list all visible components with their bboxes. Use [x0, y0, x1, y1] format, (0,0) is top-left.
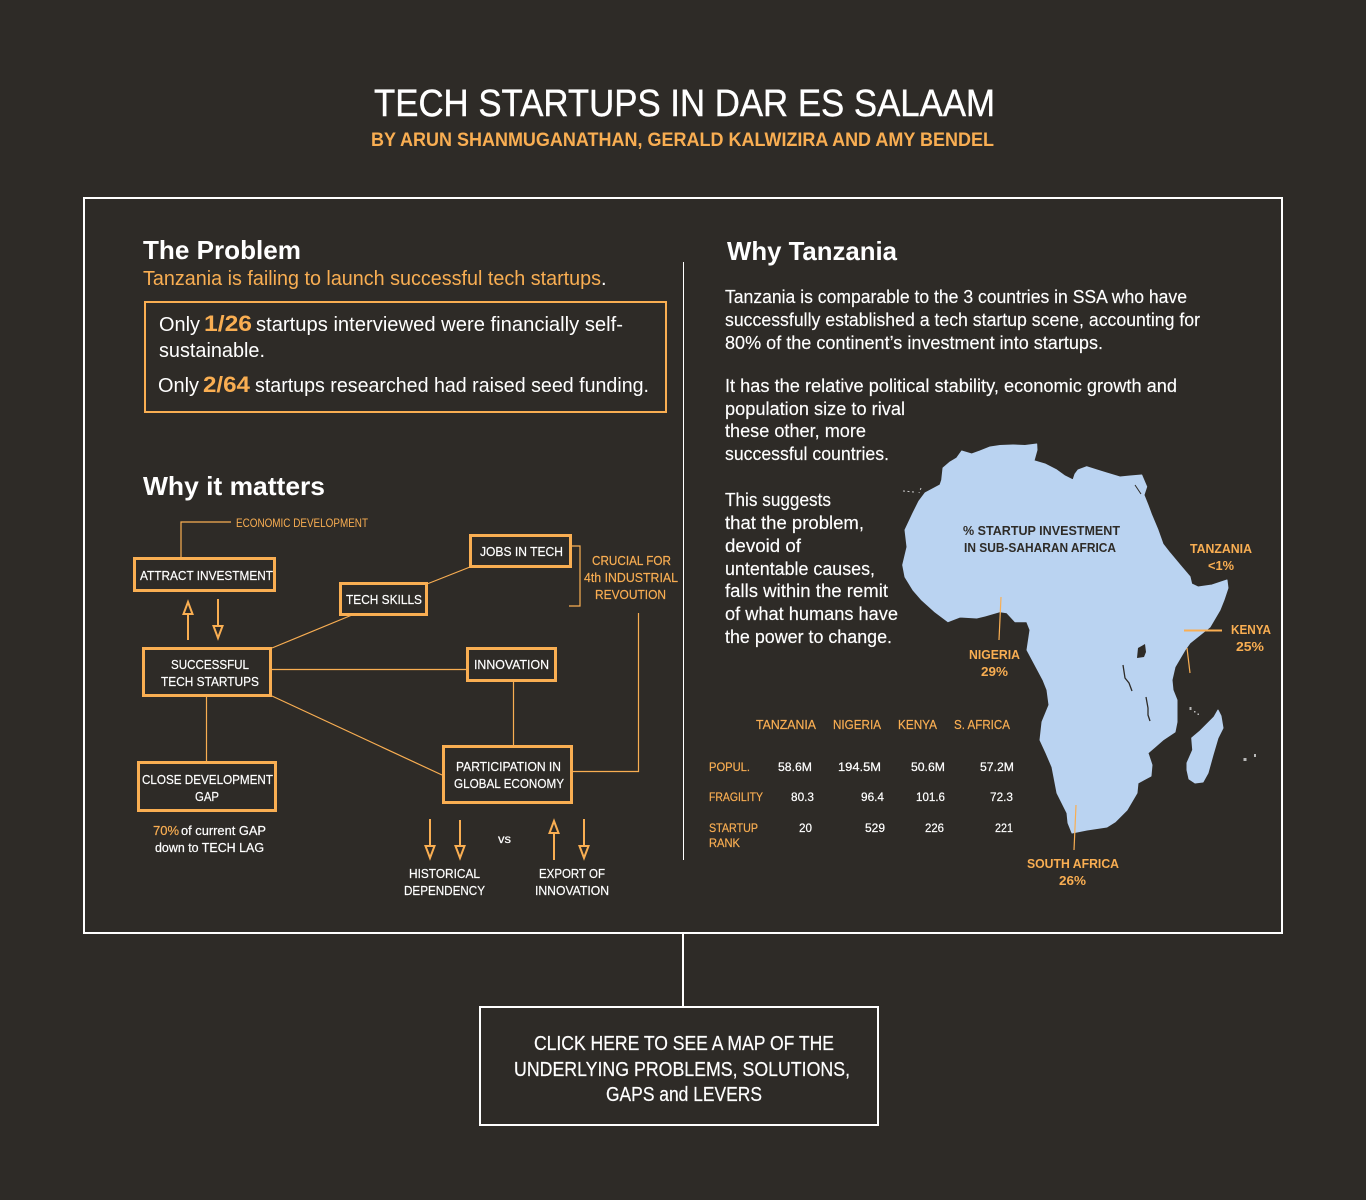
stat: 2/64: 2/64 — [203, 372, 251, 397]
row: population: 50.6M — [911, 760, 945, 774]
red sea notch — [1135, 485, 1141, 494]
paragraph: comparable countries: 80% of the continent’s investment into startups. — [725, 333, 1103, 353]
problem statement: Tanzania is failing to launch successful tech startups — [143, 268, 601, 290]
heading: why tanzania: Why Tanzania — [727, 236, 898, 266]
label: export of innovation — [535, 866, 609, 898]
paragraph: relative stability: successful countries. — [725, 444, 889, 464]
row: startup rank: RANK — [709, 836, 740, 850]
call to action button: UNDERLYING PROBLEMS, SOLUTIONS, — [514, 1059, 850, 1081]
central divider — [682, 262, 684, 860]
madagascar — [1187, 710, 1223, 783]
stat: 1/26: startups interviewed were financially self- — [256, 314, 623, 336]
paragraph: relative stability: population size to rival — [725, 399, 905, 419]
row: population: POPUL. — [709, 760, 750, 774]
paragraph: humans have the power to change: the power to change. — [725, 627, 892, 647]
callout: tanzania: <1% — [1208, 558, 1234, 573]
paragraph: humans have the power to change — [725, 490, 898, 647]
note: crucial for 4th industrial revolution: CRUCIAL FOR — [592, 553, 671, 568]
box: jobs in tech — [470, 536, 570, 566]
row: startup rank — [709, 821, 1013, 850]
callout: south africa: SOUTH AFRICA — [1027, 856, 1120, 871]
stat: 2/64: startups researched had raised seed funding. — [255, 375, 649, 397]
map caption: IN SUB-SAHARAN AFRICA — [964, 541, 1116, 555]
label: export of innovation: EXPORT OF — [539, 866, 605, 881]
label: export of innovation: INNOVATION — [535, 883, 609, 898]
text: vs: vs — [498, 832, 511, 846]
comoros islands — [1190, 707, 1199, 715]
callout: kenya: KENYA — [1231, 622, 1272, 637]
note: crucial for 4th industrial revolution: REVOUTION — [595, 587, 666, 602]
box: tech skills: TECH SKILLS — [346, 592, 422, 607]
label: historical dependency: DEPENDENCY — [404, 883, 485, 898]
map caption: % STARTUP INVESTMENT — [963, 524, 1120, 538]
connector line to button — [682, 933, 684, 1006]
map caption — [963, 524, 1120, 555]
table header: TANZANIA — [756, 718, 817, 732]
box: participation in global economy: PARTICIPATION IN — [456, 759, 561, 774]
table header: S. AFRICA — [954, 718, 1011, 732]
arrow: export of innovation down — [580, 819, 588, 858]
note: 70 percent of current gap: of current GAP — [181, 823, 266, 838]
africa mainland — [903, 444, 1228, 833]
paragraph: comparable countries: successfully established a tech startup scene, accounting for — [725, 310, 1200, 330]
note: 70 percent of current gap: 70% — [153, 823, 179, 838]
box: close development gap — [138, 762, 276, 810]
row: fragility: FRAGILITY — [709, 790, 763, 804]
stat: 1/26: Only — [159, 314, 200, 336]
row: population — [709, 760, 1014, 774]
stat: 1/26: sustainable. — [159, 340, 265, 362]
subtitle: authors: BY ARUN SHANMUGANATHAN, GERALD KALWIZIRA AND AMY BENDEL — [371, 130, 994, 151]
call to action button: GAPS and LEVERS — [606, 1084, 762, 1106]
paragraph: humans have the power to change: falls within the remit — [725, 581, 888, 601]
box: jobs in tech: JOBS IN TECH — [480, 544, 563, 559]
callout: nigeria — [969, 597, 1021, 679]
table header — [756, 718, 1011, 732]
paragraph: humans have the power to change: This suggests — [725, 490, 831, 510]
row: fragility: 101.6 — [916, 790, 945, 804]
note: crucial for 4th industrial revolution: 4th INDUSTRIAL — [584, 570, 678, 585]
stat: 1/26 — [159, 311, 623, 362]
heading: why it matters: Why it matters — [143, 471, 325, 501]
box: innovation: INNOVATION — [474, 657, 549, 672]
callout: tanzania: TANZANIA — [1190, 541, 1253, 556]
connector lines — [181, 522, 638, 775]
box: participation in global economy — [444, 746, 572, 802]
label: historical dependency — [404, 866, 485, 898]
row: fragility: 80.3 — [791, 790, 814, 804]
paragraph: humans have the power to change: that the problem, — [725, 513, 864, 533]
main panel frame — [84, 198, 1282, 933]
callout: south africa: 26% — [1059, 873, 1086, 888]
row: startup rank: 226 — [925, 821, 944, 835]
map of africa — [903, 444, 1256, 833]
lake malawi — [1146, 697, 1150, 721]
full stop: . — [601, 268, 607, 290]
note: 70 percent of current gap — [153, 823, 266, 855]
heading: the problem: The Problem — [143, 235, 301, 265]
stat: 2/64: Only — [158, 375, 199, 397]
row: fragility — [709, 790, 1013, 804]
note: 70 percent of current gap: down to TECH LAG — [155, 840, 264, 855]
table header: KENYA — [898, 718, 938, 732]
box: participation in global economy: GLOBAL ECONOMY — [454, 776, 564, 791]
arrow: historical dependency 1 — [426, 819, 434, 858]
panel: why tanzania — [709, 236, 1272, 888]
statistics box — [145, 302, 666, 412]
row: startup rank: STARTUP — [709, 821, 758, 835]
callout: nigeria: 29% — [981, 664, 1008, 679]
box: close development gap: CLOSE DEVELOPMENT — [142, 772, 273, 787]
callout: kenya — [1184, 622, 1272, 654]
box: attract investment — [134, 558, 274, 590]
table header: NIGERIA — [833, 718, 882, 732]
paragraph: humans have the power to change: of what humans have — [725, 604, 898, 624]
arrow: export of innovation up — [550, 821, 558, 860]
paragraph: comparable countries: Tanzania is comparable to the 3 countries in SSA who have — [725, 287, 1187, 307]
callout: south africa — [1027, 805, 1120, 888]
arrow: historical dependency 2 — [456, 820, 464, 858]
arrow: up to attract investment — [184, 602, 192, 640]
call to action button: CLICK HERE TO SEE A MAP OF THE — [534, 1033, 834, 1055]
panel: why it matters — [134, 471, 678, 898]
lake victoria — [1137, 644, 1146, 658]
lake tanganyika — [1123, 665, 1132, 691]
title: TECH STARTUPS IN DAR ES SALAAM — [374, 83, 995, 125]
panel: the problem — [143, 235, 666, 412]
paragraph: relative stability: these other, more — [725, 421, 866, 441]
row: startup rank: 529 — [865, 821, 885, 835]
label: economic development: ECONOMIC DEVELOPMENT — [236, 518, 368, 530]
box: successful tech startups: SUCCESSFUL — [171, 657, 249, 672]
comparison table — [709, 718, 1014, 850]
callout: nigeria: NIGERIA — [969, 647, 1021, 662]
note: crucial for 4th industrial revolution — [584, 553, 678, 602]
mauritius and reunion — [1244, 754, 1256, 761]
row: population: 194.5M — [838, 760, 881, 774]
paragraph: humans have the power to change: untentable causes, — [725, 559, 875, 579]
callout: tanzania — [1187, 541, 1253, 673]
box: close development gap: GAP — [195, 789, 219, 804]
row: startup rank: 221 — [995, 821, 1013, 835]
paragraph: comparable countries — [725, 287, 1200, 353]
row: startup rank: 20 — [799, 821, 812, 835]
row: fragility: 72.3 — [990, 790, 1013, 804]
callout: kenya: 25% — [1236, 639, 1264, 654]
row: population: 57.2M — [980, 760, 1014, 774]
row: fragility: 96.4 — [861, 790, 884, 804]
paragraph: relative stability — [725, 376, 1177, 464]
row: population: 58.6M — [778, 760, 812, 774]
stat: 2/64 — [158, 372, 649, 397]
paragraph: humans have the power to change: devoid of — [725, 536, 802, 556]
box: attract investment: ATTRACT INVESTMENT — [140, 568, 273, 583]
box: successful tech startups: TECH STARTUPS — [161, 674, 259, 689]
stat: 1/26: 1/26 — [204, 311, 252, 336]
box: successful tech startups — [144, 648, 270, 696]
box: tech skills — [340, 584, 426, 614]
canary islands — [903, 488, 921, 493]
arrow: down from attract investment — [214, 599, 222, 638]
box: innovation — [468, 648, 556, 680]
paragraph: relative stability: It has the relative political stability, economic growth and — [725, 376, 1177, 396]
label: historical dependency: HISTORICAL — [409, 866, 480, 881]
call to action button — [480, 1007, 878, 1125]
